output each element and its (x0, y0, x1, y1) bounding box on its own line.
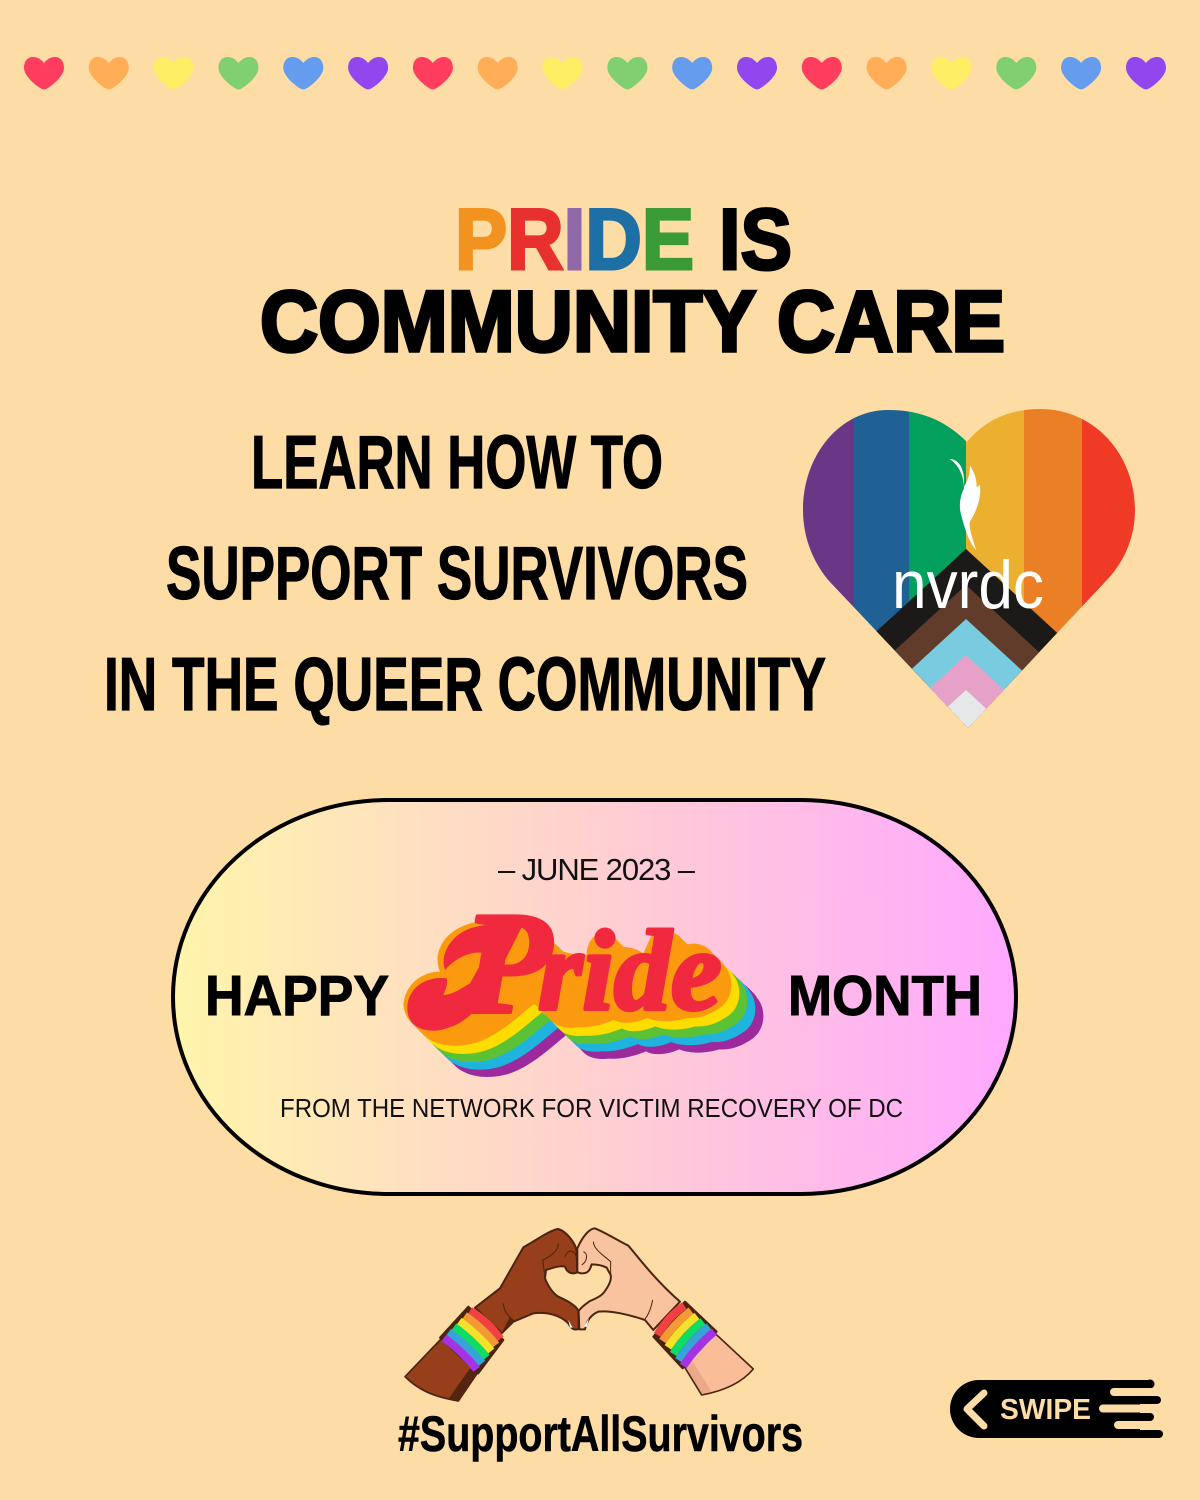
swipe badge (950, 1380, 1163, 1438)
icon: two hands forming a heart with rainbow wristbands (405, 1228, 753, 1401)
title: PRIDE (455, 192, 694, 288)
title: COMMUNITY CARE (260, 274, 1005, 370)
icon: back chevron (967, 1393, 984, 1426)
title: IS (719, 192, 792, 288)
happy label: HAPPY (205, 964, 389, 1028)
subtitle text block (104, 420, 826, 726)
month label: MONTH (788, 964, 982, 1028)
pride lettering with rainbow extrusion: ride (538, 907, 722, 1034)
credit line: FROM THE NETWORK FOR VICTIM RECOVERY OF DC (280, 1095, 903, 1123)
date line: – JUNE 2023 – (498, 852, 696, 887)
icon: flame (949, 459, 980, 550)
right wristband (653, 1302, 717, 1368)
pride lettering with rainbow extrusion (403, 882, 763, 1077)
brown hand (475, 1229, 579, 1333)
subtitle text block: SUPPORT SURVIVORS (166, 531, 748, 615)
brown arm (405, 1338, 478, 1401)
pride lettering with rainbow extrusion: P (461, 882, 553, 1044)
icon: nvrdc rainbow heart logo (803, 409, 1135, 728)
logo wordmark: nvrdc (892, 547, 1044, 623)
title (260, 192, 1005, 370)
hashtag: #SupportAllSurvivors (398, 1406, 803, 1462)
nails (568, 1318, 589, 1328)
panel: happy pride month pill (173, 800, 1016, 1194)
swipe label: SWIPE (1000, 1394, 1091, 1426)
subtitle text block: IN THE QUEER COMMUNITY (104, 642, 826, 726)
peach hand (577, 1228, 680, 1330)
peach arm (683, 1333, 753, 1395)
subtitle text block: LEARN HOW TO (251, 420, 663, 504)
finger details (503, 1242, 653, 1321)
left wristband (440, 1307, 503, 1373)
row of rainbow hearts (24, 57, 1166, 89)
